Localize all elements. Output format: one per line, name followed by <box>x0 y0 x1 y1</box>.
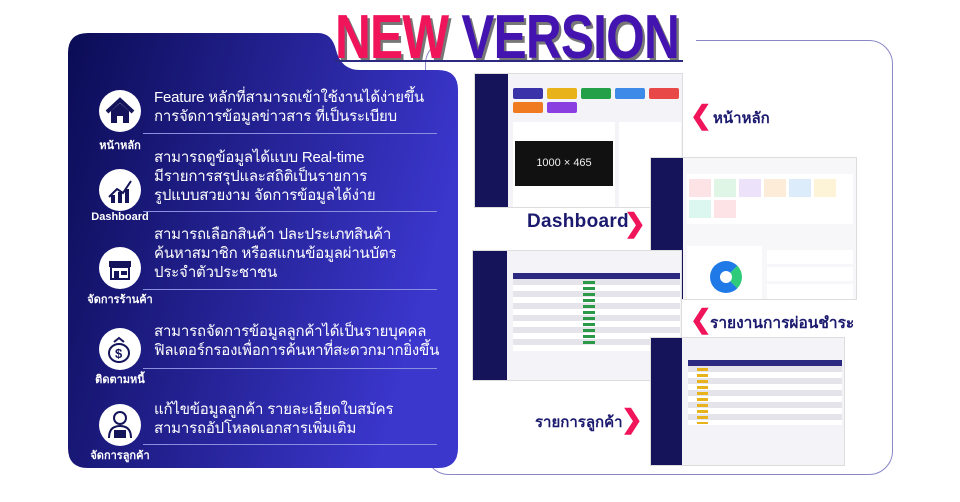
text: home: การจัดการข้อมูลข่าวสาร ที่เป็นระเบียบ <box>154 108 397 125</box>
screenshot: customer list <box>650 337 845 466</box>
caption: dashboard: ❯ <box>624 208 646 238</box>
label: dashboard: Dashboard <box>91 211 149 223</box>
caption: installment report <box>690 304 854 335</box>
screenshot: home <box>474 73 683 208</box>
text: home <box>154 86 424 125</box>
placeholder image: 1000 × 465 <box>536 157 592 169</box>
text: shop: ประจำตัวประชาชน <box>154 264 277 281</box>
text: home: Feature หลักที่สามารถเข้าใช้งานได้ง่ายขึ้น <box>154 89 424 106</box>
icon: dashboard <box>99 169 141 211</box>
caption: dashboard <box>527 208 646 239</box>
right card outline <box>425 40 893 475</box>
text: debt: สามารถจัดการข้อมูลลูกค้าได้เป็นรายบุคคล <box>154 323 426 340</box>
icon: debt: $ <box>115 346 123 361</box>
caption: installment report: รายงานการผ่อนชำระ <box>710 315 854 332</box>
label: debt: ติดตามหนี้ <box>95 374 145 386</box>
icon: shop <box>99 247 141 289</box>
caption: home: หน้าหลัก <box>713 110 770 127</box>
placeholder image <box>515 141 613 186</box>
caption: installment report: ❮ <box>690 304 712 334</box>
text: dashboard: รูปแบบสวยงาม จัดการข้อมูลได้ง่าย <box>154 187 376 204</box>
caption: dashboard: Dashboard <box>527 211 629 232</box>
screenshot: dashboard <box>650 157 857 300</box>
caption: home: ❮ <box>690 100 712 130</box>
text: customer <box>154 400 394 437</box>
icon: customer <box>99 404 141 446</box>
label: shop: จัดการร้านค้า <box>87 294 153 306</box>
text: dashboard: สามารถดูข้อมูลได้แบบ Real-time <box>154 149 364 166</box>
text: debt: ฟิลเตอร์กรองเพื่อการค้นหาที่สะดวกมากยิ่งขึ้น <box>154 342 439 359</box>
text: customer: แก้ไขข้อมูลลูกค้า รายละเอียดใบสมัคร <box>154 401 393 418</box>
text: customer: สามารถอัปโหลดเอกสารเพิ่มเติม <box>154 420 356 437</box>
text: shop: ค้นหาสมาชิก หรือสแกนข้อมูลผ่านบัตร <box>154 245 396 262</box>
text: debt <box>154 322 439 359</box>
caption: home <box>690 100 770 131</box>
text: dashboard: มีรายการสรุปและสถิติเป็นรายการ <box>154 168 367 185</box>
label: home: หน้าหลัก <box>99 140 141 152</box>
label: customer: จัดการลูกค้า <box>90 450 150 462</box>
text: shop <box>154 226 396 281</box>
icon: debt <box>99 328 141 370</box>
caption: customer list: ❯ <box>621 404 643 434</box>
caption: customer list <box>535 404 643 435</box>
text: dashboard <box>154 148 376 204</box>
text: shop: สามารถเลือกสินค้า ปละประเภทสินค้า <box>154 226 391 243</box>
screenshot: installment report <box>472 250 682 381</box>
icon: house <box>99 90 141 132</box>
caption: customer list: รายการลูกค้า <box>535 414 623 431</box>
title: NEW VERSION <box>335 3 679 72</box>
